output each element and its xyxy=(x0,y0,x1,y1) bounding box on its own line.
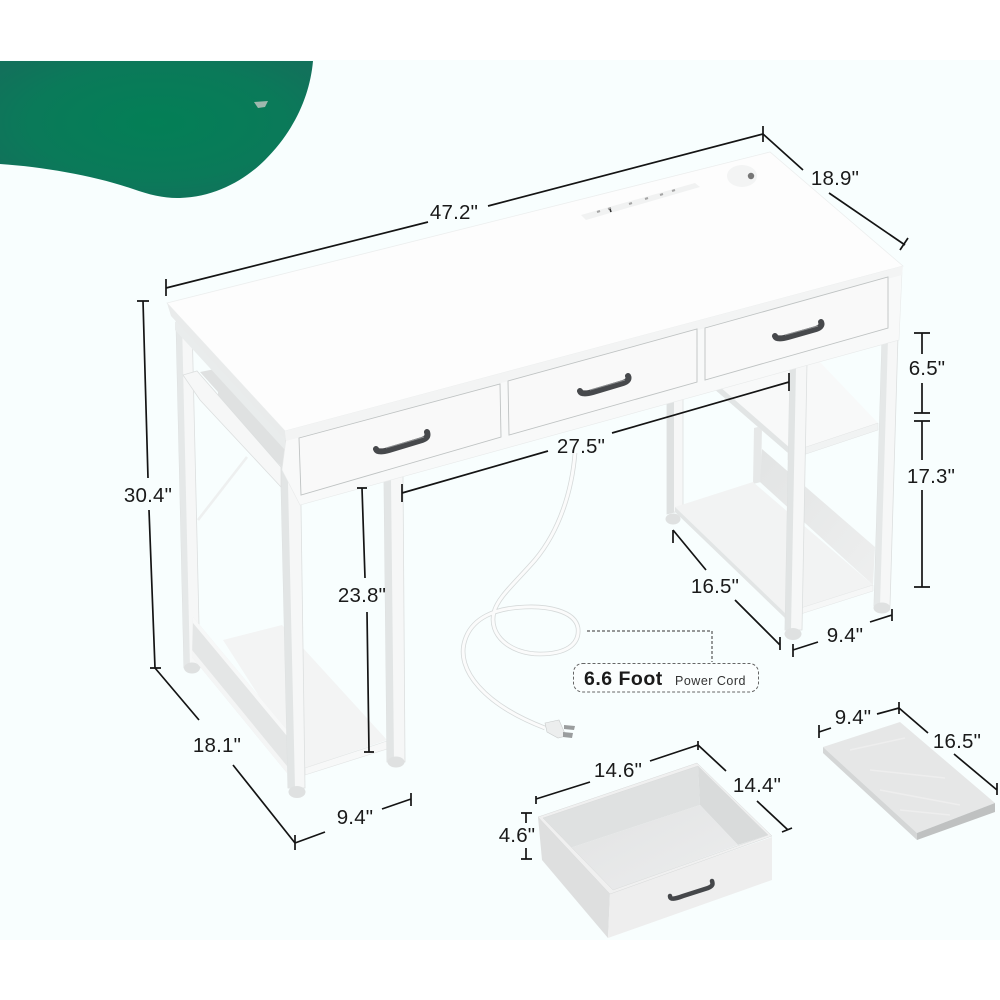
desktop left edge xyxy=(167,303,286,441)
drawer handle xyxy=(670,881,713,899)
loose drawer xyxy=(538,763,772,938)
blob speck xyxy=(254,101,268,108)
left front leg xyxy=(280,436,306,798)
left back leg xyxy=(176,322,200,674)
dimension: 14.6 in: 14.6" xyxy=(594,759,642,782)
left back panel xyxy=(192,617,287,773)
drawer front face xyxy=(608,837,772,938)
desk illustration xyxy=(167,152,903,798)
dimension: 27.5 in: 27.5" xyxy=(557,435,605,458)
dimension: 17.3 in: 17.3" xyxy=(907,465,955,488)
center front leg xyxy=(384,476,405,768)
callout: power cord length: Power Cord xyxy=(675,674,746,688)
dimension: 9.4 in, loose shelf xyxy=(819,702,899,738)
dimension: 14.4 in xyxy=(698,745,792,832)
right back panel xyxy=(760,449,875,585)
dimension: 18.9 in: 18.9" xyxy=(811,167,859,190)
right drawer handle xyxy=(775,322,821,338)
plug xyxy=(545,720,575,738)
drawer interior right wall xyxy=(698,766,768,845)
right lower shelf xyxy=(675,482,873,619)
callout: power cord length xyxy=(574,631,758,692)
middle drawer xyxy=(508,329,697,435)
right front legs xyxy=(784,336,898,640)
callout: power cord length: 6.6 Foot xyxy=(584,668,663,690)
left upper side bracket xyxy=(183,368,285,487)
dimension: 18.1 in: 18.1" xyxy=(193,734,241,757)
dimension: 6.5 in xyxy=(909,333,945,413)
left drawer xyxy=(299,384,501,495)
power strip xyxy=(581,183,700,220)
dimension: 27.5 in xyxy=(402,373,789,502)
drawer rim xyxy=(538,763,772,894)
dimension: 9.4 in, right shelf xyxy=(793,609,892,657)
dimension: 16.5 in, loose shelf xyxy=(899,708,997,795)
dimension: 18.9 in xyxy=(763,134,908,250)
dimension: 4.6 in: 4.6" xyxy=(499,824,535,847)
right inner back post xyxy=(753,426,762,484)
dimension: 4.6 in xyxy=(499,813,535,859)
dimension: 23.8 in: 23.8" xyxy=(338,584,386,607)
middle drawer handle xyxy=(580,376,628,393)
dimension: 6.5 in: 6.5" xyxy=(909,357,945,380)
right drawer xyxy=(705,277,888,380)
drawer interior floor xyxy=(570,805,738,890)
dimension: 16.5 in, right shelf: 16.5" xyxy=(691,575,739,598)
dimension: 9.4 in, loose shelf: 9.4" xyxy=(835,706,871,729)
dimension: 9.4 in, left shelf xyxy=(295,793,411,850)
desktop front edge xyxy=(285,266,903,441)
dimension: 9.4 in, right shelf: 9.4" xyxy=(827,624,863,647)
dimension: 17.3 in xyxy=(907,421,955,587)
dimension: 23.8 in xyxy=(338,488,386,752)
green corner blob xyxy=(0,61,313,198)
left lower shelf xyxy=(223,625,387,768)
drawer interior back wall xyxy=(543,766,700,848)
dimension: 47.2 in: 47.2" xyxy=(430,201,478,224)
dimension: 47.2 in xyxy=(166,126,763,296)
loose shelf board xyxy=(823,722,995,840)
dimension: 16.5 in, right shelf xyxy=(673,530,780,650)
round wire port xyxy=(727,165,757,187)
under-top side apron xyxy=(175,322,285,450)
left diagonal brace xyxy=(198,457,247,520)
left drawer handle xyxy=(376,432,427,451)
power cord xyxy=(463,453,578,738)
desktop xyxy=(167,152,903,441)
dimension: 30.4 in: 30.4" xyxy=(124,484,172,507)
dimension: 14.4 in: 14.4" xyxy=(733,774,781,797)
right upper shelf xyxy=(713,360,878,460)
dimension: 18.1 in xyxy=(155,668,295,843)
dimension: 16.5 in, loose shelf: 16.5" xyxy=(933,730,981,753)
dimension: 9.4 in, left shelf: 9.4" xyxy=(337,806,373,829)
dimension: 14.6 in xyxy=(536,741,698,804)
drawer left face xyxy=(538,817,610,938)
right back leg xyxy=(666,396,683,524)
dimension: 30.4 in xyxy=(124,301,172,668)
left shelf front rail xyxy=(305,741,387,775)
desk front apron xyxy=(282,272,902,505)
desktop surface xyxy=(167,152,903,431)
